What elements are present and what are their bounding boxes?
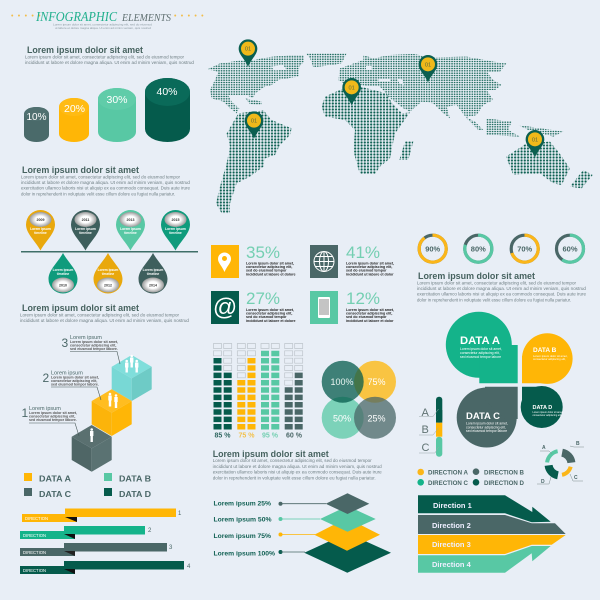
petal: data c: sed eiusmod tempor labore bbox=[466, 429, 507, 433]
cube label 1: sed eiusmod tempor labore. bbox=[29, 418, 77, 422]
text block: cylinders intro: Lorem ipsum dolor sit amet bbox=[27, 45, 144, 56]
map pin: australia: 01 bbox=[532, 137, 538, 143]
arrow band 2: Direction 2 bbox=[432, 521, 471, 530]
arrow band 1: Direction 1 bbox=[433, 501, 472, 510]
ring 60%: 60% bbox=[562, 244, 578, 254]
petal: data b: Lorem ipsum dolor sit amet, bbox=[533, 354, 568, 358]
map pin: africa: 01 bbox=[349, 85, 355, 91]
timeline drop 2014: timeline bbox=[147, 272, 159, 276]
map pin: north america: 01 bbox=[245, 47, 251, 53]
stacked cubes bbox=[22, 335, 152, 472]
abc vertical bar: A bbox=[422, 407, 430, 419]
direction bar 4: 4 bbox=[187, 564, 191, 570]
abc vertical bar: B bbox=[422, 424, 429, 436]
timeline pin 2009: timeline bbox=[34, 231, 47, 235]
text block: timeline intro bbox=[21, 165, 190, 196]
stat: 41% globe: consectetur adipiscing elit, bbox=[346, 265, 392, 269]
petal: data a bbox=[446, 312, 518, 383]
cube 2 bbox=[92, 389, 132, 436]
timeline drop 2014: Lorem ipsum bbox=[143, 268, 163, 272]
map: south america bbox=[216, 110, 292, 213]
stat: 27% at sign: consectetur adipiscing elit, bbox=[246, 312, 292, 316]
stat: 27% at sign: sed do eiusmod tempor bbox=[246, 315, 287, 319]
timeline pin 2015: Lorem ipsum bbox=[165, 227, 186, 231]
map: africa bbox=[322, 87, 410, 174]
layer label 25% bbox=[214, 500, 326, 508]
petal: data d: Lorem ipsum dolor sit amet, bbox=[532, 411, 564, 414]
map: north america bbox=[207, 55, 304, 113]
direction bar 3 bbox=[20, 543, 173, 556]
abc vertical bar bbox=[419, 397, 442, 457]
cube label 1 bbox=[22, 406, 79, 436]
stat: 27% at sign: 27% bbox=[246, 289, 280, 308]
layer label 100%: Lorem ipsum 100% bbox=[214, 550, 275, 558]
direction bars bbox=[20, 508, 191, 574]
map: eurasia bbox=[338, 54, 507, 130]
cube label 1: consectetur adipiscing elit, bbox=[29, 414, 75, 418]
timeline pin 2011 bbox=[71, 210, 100, 250]
cylinder chart bbox=[24, 78, 190, 142]
ring 90% bbox=[419, 235, 446, 262]
text block: cylinders intro: Lorem ipsum dolor sit amet, consectetur adipiscing elit, sed do eiusmod tempor bbox=[25, 54, 184, 60]
petal: data d bbox=[521, 386, 564, 428]
cube label 2: sed eiusmod tempor labore. bbox=[51, 382, 99, 386]
arrow band 4 bbox=[418, 546, 551, 573]
map pin: south america bbox=[245, 111, 263, 139]
map pin: north america bbox=[239, 39, 257, 67]
stat: 27% at sign: incididunt ut labore et dolore bbox=[246, 319, 296, 323]
text block: timeline intro: dolor in reprehenderit in voluptate velit esse cillum dolore eu fugiat nulla pariatur. bbox=[21, 192, 175, 196]
abc vertical bar: C bbox=[422, 442, 430, 454]
layer label 25%: Lorem ipsum 25% bbox=[214, 500, 271, 508]
timeline drop 2014: 2014 bbox=[149, 284, 157, 288]
petal: data b bbox=[522, 333, 573, 384]
text block: rings description: incididunt ut labore et dolore magna aliqua. Ut enim ad minim veniam, quis nostrud bbox=[417, 286, 586, 291]
text block: rings description bbox=[417, 271, 586, 302]
ring 90%: 90% bbox=[425, 244, 441, 254]
timeline drop 2012 bbox=[94, 253, 122, 293]
title bbox=[11, 9, 205, 30]
text block: cylinders intro: incididunt ut labore et dolore magna aliqua. Ut enim ad minim veniam, quis nostrud bbox=[25, 60, 194, 65]
title: • • • • • bbox=[11, 13, 42, 20]
legend: data: DATA B bbox=[119, 474, 151, 484]
title: INFOGRAPHIC bbox=[35, 9, 118, 24]
timeline drop 2010: 2010 bbox=[59, 284, 67, 288]
text block: layers intro: exercitation ullamco laboris nisi ut aliquip ex ea commodo consequat. Duis aute irure bbox=[213, 470, 382, 474]
legend: data: DATA D bbox=[119, 489, 151, 499]
stat: 12% phone: consectetur adipiscing elit, bbox=[346, 312, 392, 316]
timeline pin 2015: timeline bbox=[169, 231, 182, 235]
overlapping circles: 75% bbox=[367, 377, 386, 387]
text block: cubes intro: Lorem ipsum dolor sit amet bbox=[22, 303, 140, 314]
cylinder chart: 10% bbox=[26, 112, 47, 123]
cube label 2: 2 bbox=[42, 371, 50, 385]
cube label 1: Lorem ipsum dolor sit amet, bbox=[29, 411, 77, 415]
layer label 100% bbox=[214, 550, 305, 558]
petal: data d: DATA D bbox=[532, 405, 552, 411]
text block: rings description: dolor in reprehenderit in voluptate velit esse cillum dolore eu fugiat nulla pariatur. bbox=[417, 298, 571, 302]
text block: cubes intro bbox=[20, 303, 189, 323]
cube label 3: 3 bbox=[62, 336, 68, 350]
segmented donut: B bbox=[576, 441, 580, 447]
timeline drop 2010 bbox=[48, 253, 78, 294]
arrow band 1 bbox=[418, 495, 551, 522]
text block: timeline intro: exercitation ullamco laboris nisi ut aliquip ex ea commodo consequat. Duis aute irure bbox=[21, 186, 190, 190]
stat: 41% globe: 41% bbox=[346, 243, 380, 262]
cube 3 bbox=[112, 355, 152, 401]
cube label 3: Lorem ipsum bbox=[70, 335, 102, 341]
timeline pin 2013: 2013 bbox=[126, 218, 134, 222]
cylinder chart: 40% bbox=[156, 86, 178, 98]
direction bar 4 bbox=[20, 561, 191, 574]
layer label 50% bbox=[214, 516, 320, 524]
map pin: south america: 01 bbox=[251, 119, 257, 125]
map: southeast asia bbox=[487, 118, 520, 137]
petal: data c: Lorem ipsum dolor sit amet, bbox=[466, 422, 508, 426]
text block: timeline intro: Lorem ipsum dolor sit amet bbox=[22, 165, 140, 176]
layered diamonds bbox=[214, 493, 391, 573]
stat: 41% globe bbox=[310, 243, 394, 278]
legend: data: DATA C bbox=[39, 489, 71, 499]
text block: cubes intro: incididunt ut labore et dolore magna aliqua. Ut enim ad minim veniam, quis nostrud bbox=[20, 318, 189, 323]
text block: timeline intro: Lorem ipsum dolor sit amet, consectetur adipiscing elit, sed do eiusmod tempor bbox=[21, 174, 180, 180]
stat: 35% location: incididunt ut labore et dolore bbox=[246, 272, 296, 276]
stat: 27% at sign: Lorem ipsum dolor sit amet, bbox=[246, 308, 294, 312]
arrow band 3 bbox=[418, 535, 566, 554]
timeline drop 2010: timeline bbox=[57, 272, 69, 276]
text block: layers intro: incididunt ut labore et dolore magna aliqua. Ut enim ad minim veniam, quis nostrud bbox=[213, 464, 382, 469]
direction bar 2: DIRECTION bbox=[23, 533, 46, 538]
legend: data: DATA A bbox=[39, 474, 71, 484]
cube label 1: 1 bbox=[22, 406, 28, 420]
segmented donut: C bbox=[574, 475, 578, 481]
segmented bar chart bbox=[214, 344, 303, 440]
timeline pin 2013: Lorem ipsum bbox=[120, 227, 141, 231]
petal diagram bbox=[446, 312, 573, 448]
text block: rings description: exercitation ullamco laboris nisi ut aliquip ex ea commodo consequat. Duis aute irure bbox=[417, 292, 586, 296]
text block: timeline intro: incididunt ut labore et dolore magna aliqua. Ut enim ad minim veniam, quis nostrud bbox=[21, 180, 190, 185]
segmented bar chart: 85 % bbox=[215, 432, 231, 440]
overlapping circles bbox=[322, 361, 396, 439]
map pin: asia bbox=[419, 55, 437, 82]
stat: 35% location: consectetur adipiscing elit, bbox=[246, 265, 292, 269]
legend: directions: DIRECTION C bbox=[428, 481, 469, 487]
stat: 12% phone: sed do eiusmod tempor bbox=[346, 315, 387, 319]
text block: layers intro: dolor in reprehenderit in voluptate velit esse cillum dolore eu fugiat nulla pariatur. bbox=[213, 476, 376, 480]
stat: 12% phone: Lorem ipsum dolor sit amet, bbox=[346, 308, 394, 312]
title: ut labore et dolore magna aliqua. Ut enim ad minim veniam, quis nostrud bbox=[55, 26, 151, 30]
direction bar 1: DIRECTION bbox=[25, 516, 48, 521]
petal: data b: consectetur adipiscing elit, bbox=[533, 357, 566, 361]
legend: directions: DIRECTION B bbox=[484, 470, 525, 476]
timeline pin 2011: timeline bbox=[79, 231, 92, 235]
legend: directions bbox=[417, 468, 525, 487]
segmented bar chart: 95 % bbox=[262, 432, 279, 440]
ring 80%: 80% bbox=[471, 244, 486, 254]
text block: cylinders intro bbox=[25, 45, 194, 65]
layer label 75% bbox=[214, 532, 315, 540]
timeline bbox=[21, 210, 198, 294]
map: australia bbox=[506, 142, 570, 185]
timeline drop 2014 bbox=[138, 253, 168, 294]
ring 80% bbox=[465, 235, 492, 262]
overlapping circles: 50% bbox=[333, 414, 351, 424]
timeline pin 2015 bbox=[161, 210, 190, 250]
direction bar 2 bbox=[20, 526, 152, 539]
petal: data d: consectetur adipiscing elit, bbox=[532, 414, 562, 417]
cube label 3: sed eiusmod tempor labore. bbox=[70, 347, 118, 351]
direction bar 4: DIRECTION bbox=[23, 568, 46, 573]
timeline pin 2009 bbox=[26, 210, 55, 250]
stat: 27% at sign: @ bbox=[213, 294, 237, 321]
cube label 3: Lorem ipsum dolor sit amet, bbox=[70, 340, 118, 344]
cube label 3: consectetur adipiscing elit, bbox=[70, 344, 116, 348]
arrow band 2 bbox=[418, 515, 566, 534]
timeline pin 2015: 2015 bbox=[172, 218, 180, 222]
petal: data a: consectetur adipiscing elit, bbox=[460, 351, 500, 355]
segmented donut: A bbox=[542, 445, 546, 451]
timeline pin 2011: 2011 bbox=[82, 218, 89, 222]
cube label 2: consectetur adipiscing elit, bbox=[51, 379, 97, 383]
map pin: asia: 01 bbox=[425, 62, 431, 68]
direction bar 1: 1 bbox=[178, 511, 182, 517]
title: ELEMENTS bbox=[121, 13, 171, 24]
direction bar 1 bbox=[22, 508, 182, 522]
direction bar 3: DIRECTION bbox=[23, 550, 46, 555]
ring 60% bbox=[556, 235, 584, 262]
stat: 41% globe: incididunt ut labore et dolor bbox=[346, 272, 394, 276]
overlapping circles: 25% bbox=[367, 414, 386, 424]
stat: 41% globe: Lorem ipsum dolor sit amet, bbox=[346, 262, 394, 266]
cube 1 bbox=[72, 425, 112, 472]
map pin: africa bbox=[342, 78, 361, 105]
petal: data b: DATA B bbox=[533, 347, 557, 354]
overlapping circles: 100% bbox=[330, 377, 354, 387]
direction bar 2: 2 bbox=[148, 528, 152, 534]
cube label 2: Lorem ipsum bbox=[51, 370, 83, 376]
stat: 41% globe: sed do eiusmod tempor bbox=[346, 268, 387, 272]
cube label 1: Lorem ipsum bbox=[29, 406, 61, 412]
cube label 3 bbox=[62, 335, 120, 364]
stat: 12% phone bbox=[310, 289, 394, 324]
map pin: australia bbox=[526, 130, 544, 157]
legend: directions: DIRECTION D bbox=[484, 481, 525, 487]
title: Lorem ipsum dolor sit amet, consectetur adipiscing elit, sed do eiusmod bbox=[53, 22, 152, 26]
segmented donut bbox=[537, 441, 584, 485]
cylinder chart: 20% bbox=[64, 103, 85, 115]
timeline pin 2009: 2009 bbox=[36, 218, 44, 222]
cube label 2: Lorem ipsum dolor sit amet, bbox=[51, 376, 99, 380]
title: • • • • • bbox=[174, 13, 205, 20]
stat: 12% phone: incididunt ut labore et dolor bbox=[346, 319, 394, 323]
text block: rings description: Lorem ipsum dolor sit amet, consectetur adipiscing elit, sed do eiusmod tempor bbox=[417, 280, 576, 286]
text block: cubes intro: Lorem ipsum dolor sit amet, consectetur adipiscing elit, sed do eiusmod tempor bbox=[20, 312, 179, 318]
petal: data a: sed eiusmod tempor labore bbox=[460, 355, 501, 359]
timeline drop 2012: 2012 bbox=[104, 284, 112, 288]
stat: 35% location bbox=[211, 243, 296, 278]
arrow band 3: Direction 3 bbox=[432, 540, 471, 549]
cube label 2 bbox=[42, 370, 101, 400]
direction arrow bbox=[418, 495, 566, 573]
timeline pin 2013: timeline bbox=[124, 231, 137, 235]
stat: 35% location: 35% bbox=[246, 243, 280, 262]
stat: 12% phone: 12% bbox=[346, 289, 380, 308]
stat: 27% at sign bbox=[211, 289, 296, 324]
text block: layers intro: Lorem ipsum dolor sit amet, consectetur adipiscing elit, sed do eiusmod tempor bbox=[213, 458, 372, 463]
layer label 75%: Lorem ipsum 75% bbox=[214, 533, 271, 540]
timeline drop 2012: Lorem ipsum bbox=[98, 268, 118, 272]
timeline drop 2012: timeline bbox=[102, 272, 114, 276]
petal: data c bbox=[457, 387, 518, 448]
ring 70% bbox=[511, 235, 538, 262]
layer label 50%: Lorem ipsum 50% bbox=[214, 516, 272, 524]
legend: directions: DIRECTION A bbox=[428, 470, 469, 476]
petal: data c: consectetur adipiscing elit, bbox=[466, 426, 506, 430]
stat: 35% location: Lorem ipsum dolor sit amet, bbox=[246, 262, 294, 266]
legend: data bbox=[24, 473, 151, 499]
arrow band 4: Direction 4 bbox=[432, 560, 472, 569]
world map bbox=[207, 39, 593, 213]
progress rings bbox=[419, 235, 584, 262]
segmented donut: D bbox=[541, 479, 545, 485]
text block: rings description: Lorem ipsum dolor sit amet bbox=[418, 271, 536, 282]
text block: layers intro: Lorem ipsum dolor sit amet bbox=[213, 449, 329, 460]
segmented bar chart: 60 % bbox=[286, 432, 303, 440]
timeline pin 2013 bbox=[116, 210, 145, 250]
timeline drop 2010: Lorem ipsum bbox=[53, 268, 73, 272]
segmented bar chart: 75 % bbox=[239, 432, 255, 440]
direction bar 3: 3 bbox=[169, 545, 173, 551]
petal: data a: Lorem ipsum dolor sit amet, bbox=[460, 347, 502, 351]
petal: data c: DATA C bbox=[466, 411, 500, 422]
petal: data a: DATA A bbox=[460, 335, 500, 347]
text block: layers intro bbox=[213, 449, 382, 480]
ring 70%: 70% bbox=[517, 244, 533, 254]
cylinder chart: 30% bbox=[106, 94, 128, 106]
timeline pin 2011: Lorem ipsum bbox=[75, 227, 96, 231]
timeline pin 2009: Lorem ipsum bbox=[30, 227, 51, 231]
stat: 35% location: sed do eiusmod tempor bbox=[246, 268, 287, 272]
